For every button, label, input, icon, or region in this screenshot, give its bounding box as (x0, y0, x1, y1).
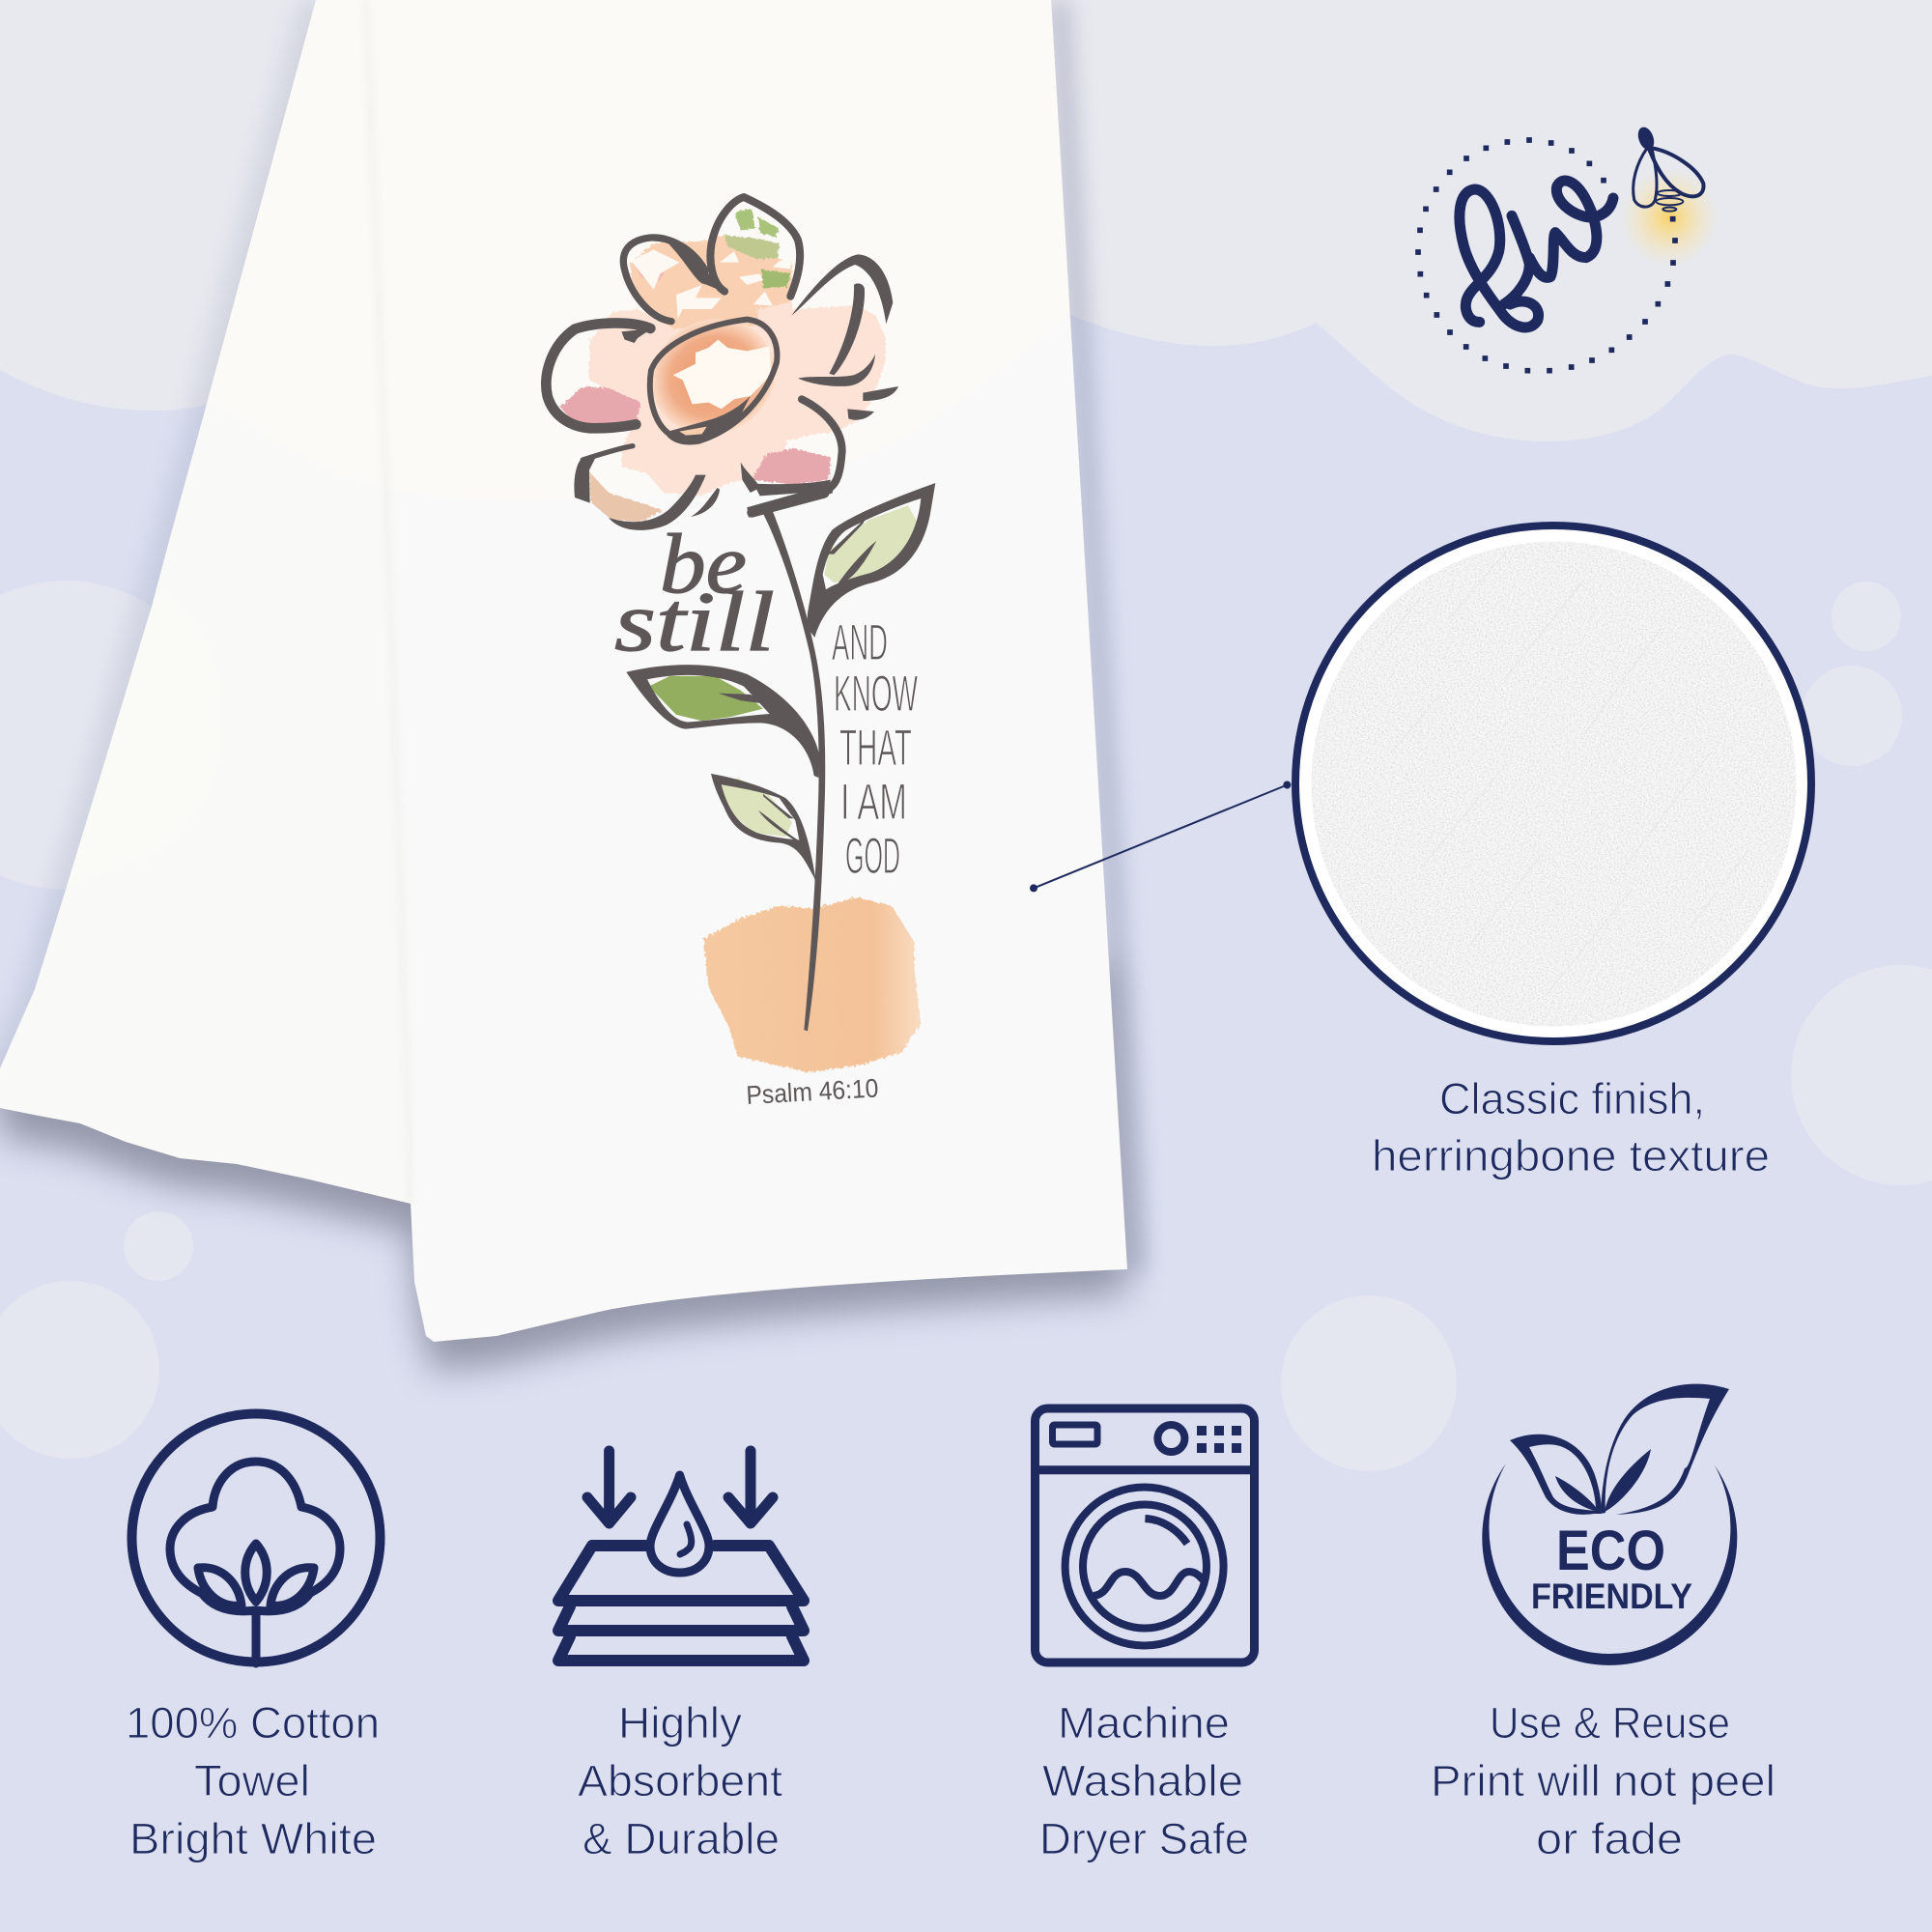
printed design: stem and leaves (626, 483, 935, 1072)
logo dotted ring (1418, 140, 1675, 371)
label: eco friendly (1431, 1698, 1776, 1863)
label: absorbent: Absorbent (578, 1756, 783, 1805)
printed text: be still (614, 518, 775, 669)
label: absorbent: & Durable (582, 1814, 780, 1863)
label: washable: Machine (1058, 1698, 1230, 1747)
label: cotton: Bright White (129, 1814, 377, 1863)
feature: absorbent (558, 1451, 804, 1863)
label: eco friendly: Use & Reuse (1490, 1698, 1730, 1747)
flower centre white spot (673, 340, 771, 409)
label: cotton: 100% Cotton (126, 1698, 380, 1747)
label: washable: Washable (1042, 1756, 1243, 1805)
icon: cotton boll (131, 1414, 381, 1663)
icon: absorbent layers with drop (558, 1451, 804, 1661)
feature: cotton (126, 1414, 381, 1863)
brand logo (1418, 127, 1719, 371)
feature: washable (1035, 1408, 1255, 1863)
flower watercolour washes (560, 209, 886, 522)
printed text: be still: be (660, 518, 747, 611)
label: absorbent: Highly (618, 1698, 743, 1747)
fabric caption: herringbone texture (1372, 1131, 1770, 1180)
background cloud shape (0, 0, 1932, 483)
icon: washing machine (1035, 1408, 1255, 1662)
printed text: psalm reference: Psalm 46:10 (746, 1073, 879, 1110)
label: cotton (126, 1698, 380, 1863)
logo glow (1620, 167, 1719, 268)
printed text: and know that i am god: I AM (840, 774, 907, 831)
towel bottom shadow (0, 966, 1127, 1371)
leaf colour washes (649, 505, 923, 837)
fabric caption (1372, 1074, 1770, 1180)
label: washable: Dryer Safe (1039, 1814, 1249, 1863)
printed text: and know that i am god: KNOW (834, 666, 918, 723)
flower white gaps (631, 203, 792, 319)
towel: front panel (366, 0, 1127, 1342)
label: eco friendly: or fade (1536, 1814, 1683, 1863)
background bubbles (0, 581, 1932, 1471)
callout leader line (1030, 781, 1291, 892)
logo script mark (1460, 181, 1613, 327)
fabric caption: Classic finish, (1439, 1074, 1705, 1123)
printed text: and know that i am god: THAT (839, 720, 912, 777)
label: washable (1039, 1698, 1249, 1863)
icon: eco friendly badge: FRIENDLY (1531, 1577, 1692, 1616)
peach watercolour block (703, 897, 921, 1072)
flower centre wash (633, 299, 794, 454)
towel left edge shadow (0, 0, 386, 1121)
flower line work (546, 197, 898, 530)
printed text: be still: still (614, 576, 775, 669)
fabric detail callout (1030, 526, 1811, 1180)
towel right edge shadow (1051, 0, 1144, 1271)
feature: eco friendly (1431, 1384, 1776, 1863)
stem and leaf outlines (626, 483, 935, 1031)
fabric swatch circle (1295, 526, 1811, 1041)
icon: eco friendly badge (1482, 1384, 1737, 1665)
label: cotton: Towel (194, 1756, 310, 1805)
label: absorbent (578, 1698, 783, 1863)
label: eco friendly: Print will not peel (1431, 1756, 1776, 1805)
towel tint from overlaid cloud and bubble (58, 0, 1069, 1204)
printed design: flower (546, 197, 898, 530)
printed text: and know that i am god: GOD (845, 828, 900, 885)
printed text: and know that i am god (832, 614, 918, 885)
printed text: and know that i am god: AND (832, 614, 888, 671)
towel: back fold (0, 0, 444, 1204)
icon: eco friendly badge: ECO (1556, 1520, 1665, 1582)
logo firefly (1634, 127, 1703, 212)
